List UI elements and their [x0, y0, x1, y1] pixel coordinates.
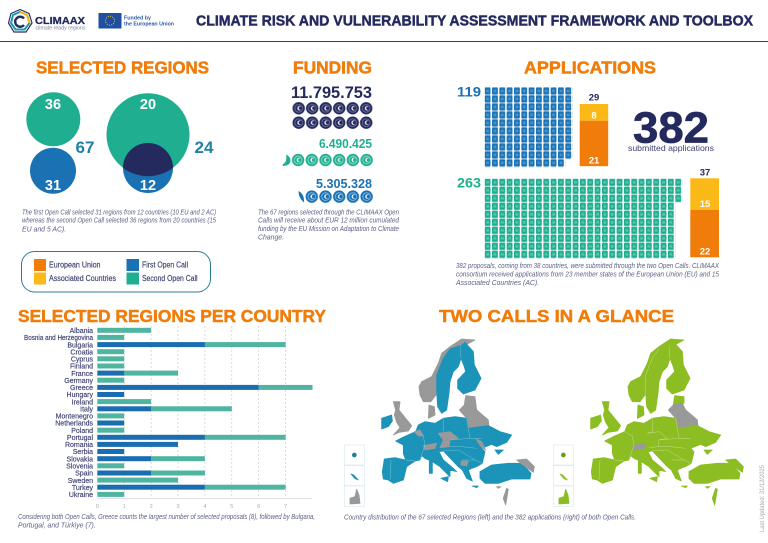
- chart: regions by open call: 67: [76, 138, 94, 157]
- funding: first open call amount: [298, 177, 374, 204]
- heading: selected regions per country: SELECTED REGIONS PER COUNTRY: [18, 306, 326, 326]
- bar chart: regions per country: Serbia: [73, 449, 93, 456]
- stacked bar: second call 37: 37: [700, 168, 710, 178]
- waffle: first open call applications: 119: [457, 84, 481, 100]
- text: funding description: Calls will receive about EUR 12 million cumulated: [258, 218, 400, 225]
- chart: countries by open call: 20: [140, 97, 156, 113]
- stacked bar: second call 37: 22: [700, 246, 710, 258]
- legend: European Union: [49, 260, 100, 270]
- text: selected regions description: The first Open Call selected 31 regions from 12 countries (10 EU and 2 AC): [22, 210, 216, 216]
- text: funding description: The 67 regions selected through the CLIMAAX Open: [258, 210, 399, 216]
- chart: regions by open call: 31: [45, 178, 61, 194]
- text: funding description: Change.: [258, 234, 284, 241]
- heading: funding: FUNDING: [293, 58, 372, 78]
- waffle: first open call applications: [457, 84, 573, 167]
- text: applications description: [455, 263, 719, 287]
- chart: regions by open call: 36: [45, 97, 61, 113]
- legend: [22, 252, 210, 292]
- header: CLIMAAX logo: CLIMAAX: [35, 15, 85, 27]
- text: funding description: funding by the EU Mission on Adaptation to Climate: [258, 226, 399, 233]
- bar chart: regions per country: 7: [284, 504, 287, 510]
- stacked bar: first call 29: 8: [591, 110, 597, 122]
- bar chart: regions per country: 3: [176, 504, 180, 510]
- bar chart: regions per country: Montenegro: [56, 414, 93, 421]
- bar chart: regions per country: Slovenia: [66, 464, 93, 470]
- text: maps description: Country distribution of the 67 selected Regions (left) and the 382 applications (right) of both Open Calls.: [344, 514, 636, 522]
- legend: Second Open Call: [142, 274, 198, 283]
- text: country chart description: Portugal, and Türkiye (7).: [18, 522, 96, 530]
- funding: total amount: 11.795.753: [291, 83, 372, 102]
- legend: First Open Call: [142, 260, 188, 270]
- bar chart: regions per country: Ireland: [72, 399, 93, 406]
- funding: total amount: [291, 83, 373, 130]
- bar chart: regions per country: Italy: [80, 406, 93, 414]
- total applications: 382: [633, 104, 709, 152]
- funding: second open call amount: 6.490.425: [319, 137, 372, 151]
- stacked bar: second call 37: 15: [700, 199, 711, 210]
- heading: applications: APPLICATIONS: [524, 58, 656, 78]
- bar chart: regions per country: Croatia: [70, 349, 93, 356]
- bar chart: regions per country: 0: [96, 504, 99, 510]
- bar chart: regions per country: 6: [257, 504, 260, 510]
- map: selected regions: [344, 339, 534, 507]
- stacked bar: first call 29: [580, 92, 608, 166]
- total applications: submitted applications: [628, 143, 715, 153]
- bar chart: regions per country: 1: [123, 504, 126, 510]
- bar chart: regions per country: Germany: [64, 378, 93, 385]
- text: selected regions description: [22, 210, 216, 233]
- bar chart: regions per country: Sweden: [68, 478, 93, 485]
- chart: countries by open call: 24: [195, 138, 214, 157]
- text: applications description: consortium received applications from 23 member states of the European Union (EU) and 15: [456, 271, 719, 278]
- map: applications: [553, 339, 743, 507]
- header: EU funding badge: [98, 13, 174, 28]
- heading: two calls in a glance: TWO CALLS IN A GLANCE: [439, 306, 674, 326]
- bar chart: regions per country: Bulgaria: [67, 342, 93, 349]
- bar chart: regions per country: Portugal: [67, 435, 93, 442]
- bar chart: regions per country: Turkey: [72, 485, 93, 492]
- stacked bar: second call 37: [690, 168, 719, 258]
- last updated note: Last Updated: 31/12/2025: [759, 465, 766, 532]
- bar chart: regions per country: Poland: [71, 428, 93, 435]
- header: CLIMAAX logo: climate ready regions: [36, 26, 86, 32]
- bar chart: regions per country: Hungary: [67, 392, 93, 399]
- bar chart: regions per country: France: [71, 371, 93, 378]
- text: country chart description: Considering both Open Calls, Greece counts the largest number of selected proposals (8), followed by Bulgaria,: [18, 514, 315, 521]
- text: applications description: Associated Countries (AC).: [455, 280, 539, 287]
- bar chart: regions per country: 2: [150, 504, 153, 510]
- header: CLIMAAX logo: [8, 10, 86, 32]
- bar chart: regions per country: Romania: [65, 442, 93, 449]
- heading: selected regions: SELECTED REGIONS: [36, 58, 209, 78]
- text: selected regions description: whereas the second Open Call selected 36 regions from 20 countries (15: [22, 218, 216, 225]
- funding: second open call amount: [282, 137, 374, 167]
- waffle: second open call applications: 263: [457, 176, 482, 190]
- bar chart: regions per country: Netherlands: [55, 421, 93, 428]
- bar chart: regions per country: 5: [230, 504, 233, 510]
- text: selected regions description: EU and 5 AC).: [22, 226, 66, 233]
- bar chart: regions per country: Ukraine: [69, 492, 93, 499]
- stacked bar: first call 29: 29: [589, 92, 599, 104]
- chart: countries by open call: [106, 93, 214, 194]
- bar chart: regions per country: Cyprus: [71, 356, 93, 364]
- text: country chart description: [18, 514, 315, 530]
- bar chart: regions per country: Spain: [75, 471, 93, 478]
- header: EU funding badge: Funded by: [124, 16, 151, 22]
- chart: regions by open call: [26, 92, 94, 194]
- bar chart: regions per country: Bosnia and Herzegovina: [24, 335, 93, 342]
- main title: CLIMATE RISK AND VULNERABILITY ASSESSMENT FRAMEWORK AND TOOLBOX: [196, 14, 753, 30]
- header: EU funding badge: the European Union: [124, 22, 174, 28]
- bar chart: regions per country: [24, 326, 312, 510]
- bar chart: regions per country: Greece: [70, 385, 93, 392]
- bar chart: regions per country: Slovakia: [67, 456, 93, 463]
- legend: Associated Countries: [49, 274, 116, 283]
- funding: first open call amount: 5.305.328: [316, 177, 372, 191]
- text: funding description: [258, 210, 400, 241]
- bar chart: regions per country: Albania: [70, 328, 93, 335]
- text: applications description: 382 proposals, coming from 38 countries, were submitted through the two Open Calls. CLIMAAX: [456, 263, 719, 270]
- bar chart: regions per country: Finland: [70, 364, 93, 371]
- stacked bar: first call 29: 21: [589, 156, 600, 166]
- bar chart: regions per country: 4: [203, 504, 206, 510]
- chart: countries by open call: 12: [140, 178, 156, 194]
- waffle: second open call applications: [457, 176, 683, 259]
